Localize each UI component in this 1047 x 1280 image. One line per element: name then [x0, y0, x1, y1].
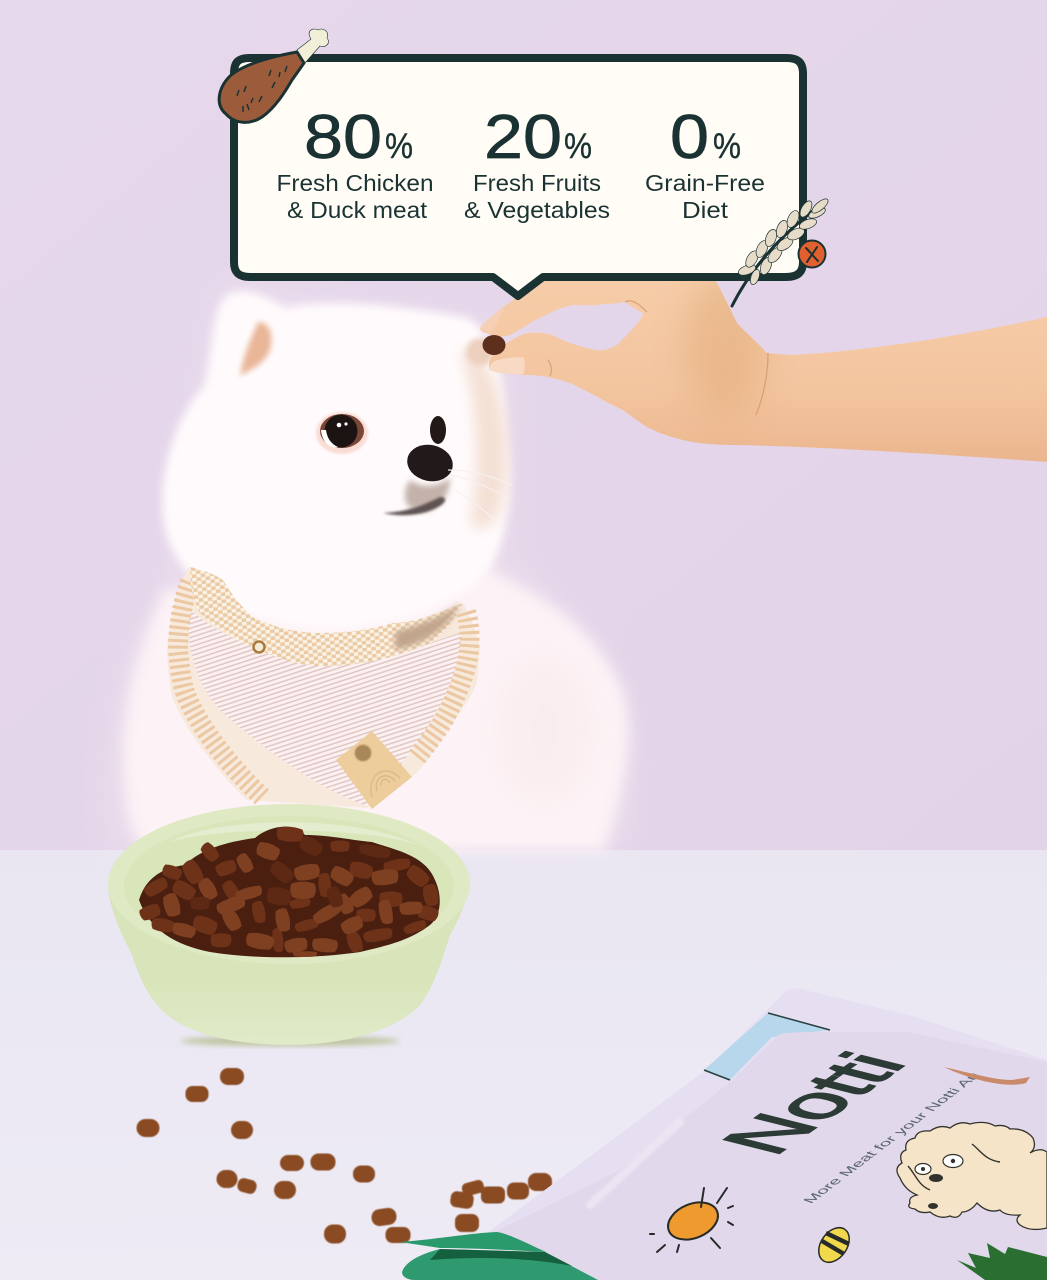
stat: 20%: Fresh Fruits — [473, 170, 601, 196]
bag window lines — [704, 1013, 830, 1080]
stat: 80%: 80 — [304, 103, 382, 172]
grass illustration — [957, 1243, 1047, 1280]
right ear inner — [466, 338, 494, 366]
icon: sun — [650, 1188, 733, 1252]
whiskers — [448, 470, 512, 530]
neck shadow — [395, 603, 460, 650]
stat: 20%: 20 — [484, 103, 562, 172]
speech bubble — [234, 58, 803, 296]
dog cheek shading — [460, 350, 507, 528]
dog muzzle shadow — [405, 478, 450, 512]
arm and hand — [480, 281, 1047, 462]
poodle nose — [929, 1174, 943, 1182]
stat: 0%: Diet — [682, 197, 729, 223]
brand name: Notti — [703, 1045, 926, 1161]
dog head — [162, 291, 510, 628]
stat: 20%: % — [564, 127, 592, 166]
dog nose — [404, 441, 456, 485]
wheat stem — [732, 204, 822, 306]
tagline: More Meat for your Notti Au — [800, 1071, 984, 1205]
bowl shadow — [180, 1036, 400, 1046]
green flap — [400, 1232, 598, 1280]
icon: chicken drumstick — [219, 29, 328, 122]
bag zipper highlight — [590, 1122, 680, 1205]
stat: 20%: & Vegetables — [464, 197, 610, 223]
bag back panel — [487, 988, 1047, 1280]
poodle curl — [908, 1144, 1000, 1190]
poodle paw — [928, 1203, 938, 1209]
bowl rim — [108, 804, 470, 964]
bandana cloth — [189, 610, 462, 806]
bandana collar roll — [190, 567, 463, 666]
bandana grommet — [254, 642, 264, 652]
tag arcs — [371, 771, 400, 797]
stat: 0%: 0 — [670, 103, 709, 172]
kibble mound — [138, 826, 440, 957]
poodle eyes — [943, 1154, 963, 1168]
dog left eye — [316, 412, 368, 454]
stat: 80%: Fresh Chicken — [276, 170, 434, 196]
dog right eye — [430, 416, 446, 444]
stat: 80%: % — [385, 127, 413, 166]
fingernail index — [480, 309, 504, 333]
dog mouth — [383, 497, 445, 515]
red cross badge — [798, 240, 826, 268]
icon: bee — [812, 1222, 856, 1268]
stat: 0%: Grain-Free — [645, 170, 765, 196]
dog ear inner — [240, 322, 272, 376]
table surface — [0, 850, 1047, 1280]
dog chest shading — [495, 655, 595, 805]
bag label ribbon — [944, 1067, 1030, 1085]
stat: 80%: & Duck meat — [287, 197, 427, 223]
bowl inner — [124, 816, 454, 956]
dog glow — [108, 285, 631, 851]
wall background — [0, 0, 1047, 851]
stat: 80% — [276, 103, 434, 223]
scattered kibble — [136, 1068, 552, 1244]
stat: 20% — [464, 103, 610, 223]
stat: 0%: % — [713, 127, 741, 166]
kibble held in fingers — [482, 335, 506, 355]
poodle illustration — [897, 1122, 1047, 1229]
wheat leaves — [737, 197, 830, 286]
bowl inner highlight — [170, 822, 420, 846]
palm shadow — [685, 275, 765, 415]
fingernail thumb — [490, 357, 525, 374]
bowl body — [108, 883, 470, 1045]
stat: 0% — [645, 103, 765, 223]
tag grommet — [354, 744, 372, 762]
bandana fringe stripes — [178, 582, 470, 797]
leather tag — [336, 731, 412, 809]
finger crease — [548, 301, 768, 415]
bowl with kibble — [108, 804, 470, 1046]
bag blue window — [704, 1013, 830, 1080]
product bag — [400, 988, 1047, 1280]
icon: crossed-out grain — [732, 197, 830, 306]
bandana — [167, 567, 480, 809]
bag front face — [490, 1032, 1047, 1280]
dog body — [123, 570, 628, 851]
dog — [108, 285, 631, 851]
bandana base — [167, 567, 480, 808]
